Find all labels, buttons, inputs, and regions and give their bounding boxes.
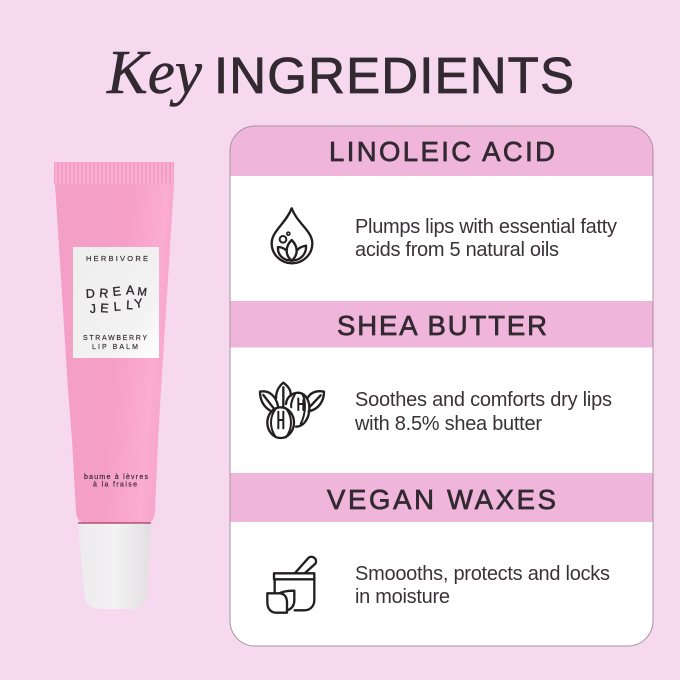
text: shea butter description: Soothes and comforts dry lips xyxy=(355,389,612,411)
icon: shea nuts and leaves xyxy=(260,383,324,438)
text: vegan waxes description xyxy=(355,563,610,608)
product label: M xyxy=(137,286,147,299)
text: shea butter description xyxy=(354,389,612,435)
product label: Y xyxy=(133,296,144,311)
title: Key xyxy=(106,39,202,107)
panel: ingredients card xyxy=(230,126,653,646)
panel header: vegan waxes: VEGAN WAXES xyxy=(327,484,556,515)
icon: oil drop with lotus xyxy=(272,208,312,263)
panel header: linoleic acid: LINOLEIC ACID xyxy=(329,136,555,167)
product label: L xyxy=(113,299,121,314)
panel header: vegan waxes xyxy=(230,473,653,522)
product label: D xyxy=(85,287,95,301)
french product text: baume à lèvres xyxy=(84,474,148,481)
french product text xyxy=(84,474,148,488)
panel header: shea butter xyxy=(230,301,653,348)
product label: E xyxy=(112,284,122,299)
product label: STRAWBERRY xyxy=(83,335,147,342)
panel header: shea butter: SHEA BUTTER xyxy=(337,310,547,341)
product label: HERBIVORE xyxy=(86,254,148,263)
product label: A xyxy=(126,284,135,298)
panel outline xyxy=(230,126,653,646)
product label: L xyxy=(126,298,134,312)
panel header: linoleic acid xyxy=(230,126,653,176)
icon: mortar and pestle xyxy=(267,557,316,613)
french product text: à la fraise xyxy=(93,482,137,488)
product: lip balm tube xyxy=(54,162,174,609)
title xyxy=(106,39,574,107)
text: linoleic acid description xyxy=(355,216,617,261)
product label: J xyxy=(89,302,96,316)
text: shea butter description: with 8.5% shea butter xyxy=(354,413,542,435)
text: linoleic acid description: acids from 5 natural oils xyxy=(355,239,559,261)
crimped ribs xyxy=(54,162,174,184)
tube cap xyxy=(78,524,151,609)
tube body xyxy=(54,162,174,523)
title: INGREDIENTS xyxy=(214,47,574,104)
product label xyxy=(73,247,159,358)
text: linoleic acid description: Plumps lips with essential fatty xyxy=(355,216,617,238)
text: vegan waxes description: in moisture xyxy=(355,586,450,608)
product label: LIP BALM xyxy=(92,344,138,351)
product label: E xyxy=(100,301,109,316)
product label: R xyxy=(99,286,109,301)
text: vegan waxes description: Smoooths, protects and locks xyxy=(355,563,610,585)
